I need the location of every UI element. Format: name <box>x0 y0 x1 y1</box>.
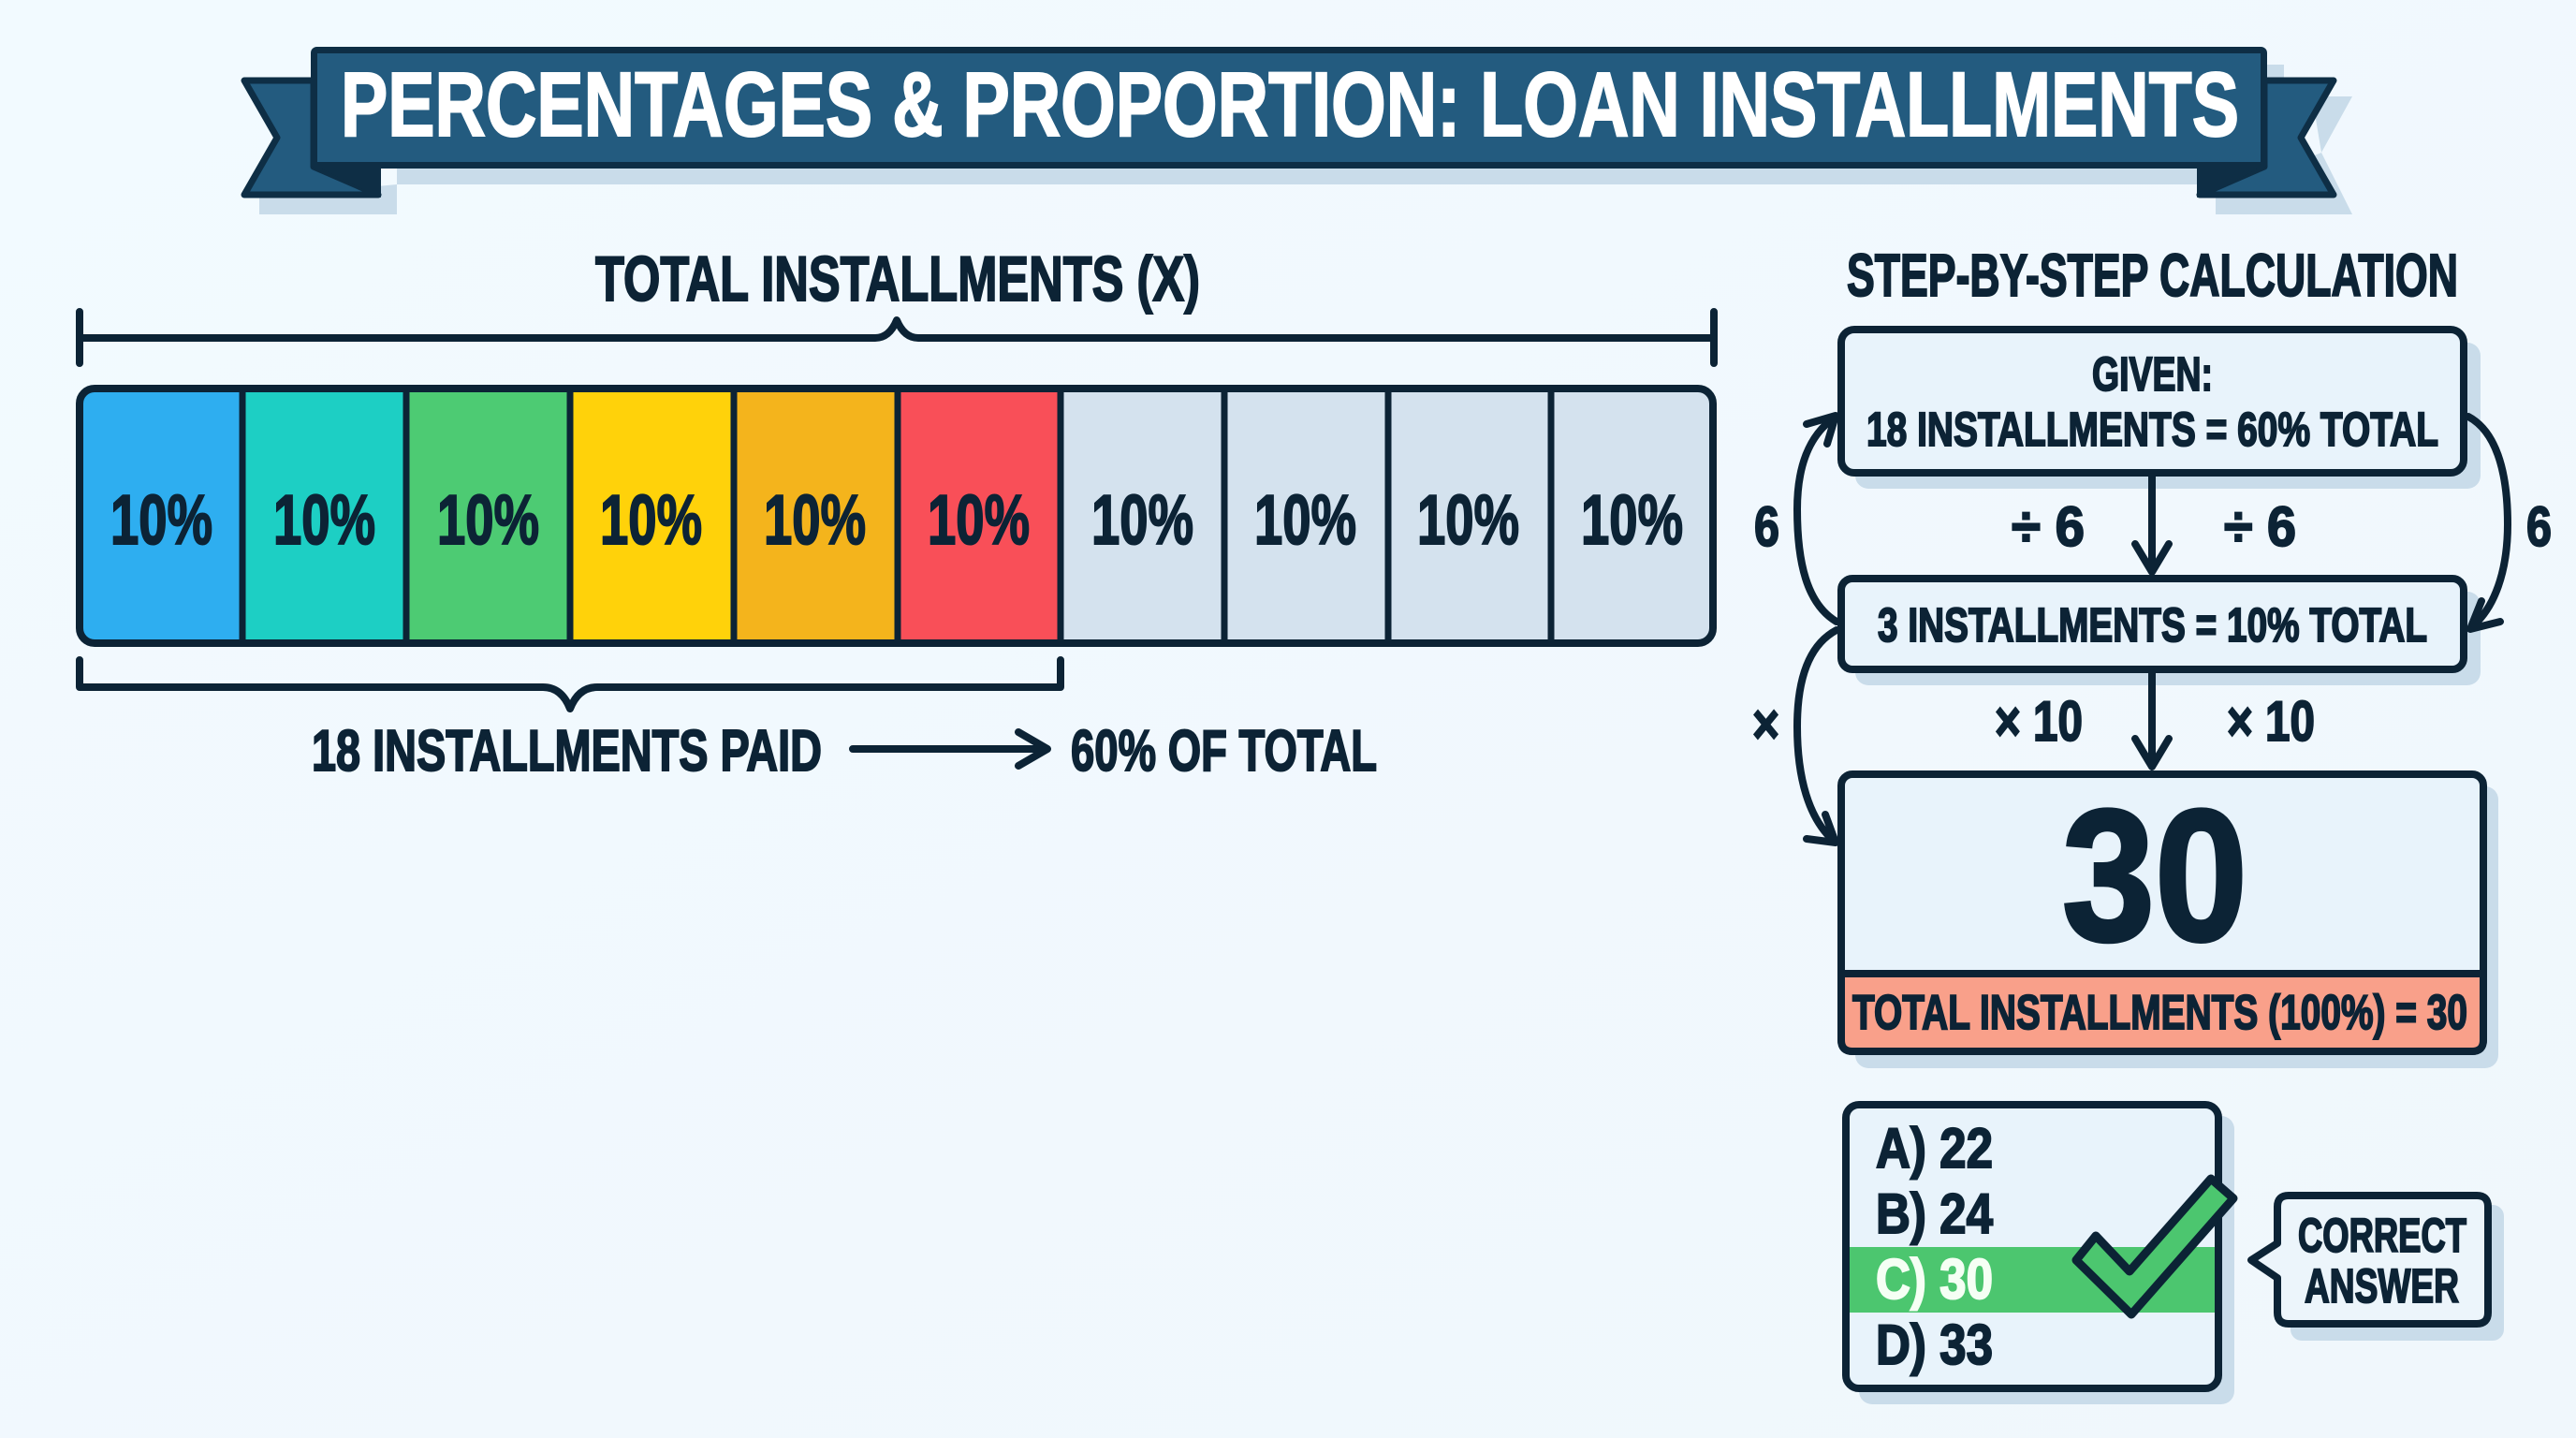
option A: A) 22 <box>1876 1117 1993 1180</box>
label: divide left: ÷ 6 <box>2012 495 2085 558</box>
cell 10 grey: 10% <box>1581 480 1683 559</box>
option B: B) 24 <box>1876 1182 1994 1245</box>
label: multiply right: × 10 <box>2227 690 2315 753</box>
cell 1 blue: 10% <box>110 480 212 559</box>
heading: total installments: TOTAL INSTALLMENTS (X) <box>595 243 1200 315</box>
cell 8 grey <box>1224 389 1388 643</box>
label: side multiply: × <box>1752 693 1779 756</box>
arrow: paid to percent <box>853 732 1047 766</box>
cell 4 yellow: 10% <box>600 480 702 559</box>
cell 6 red: 10% <box>928 480 1030 559</box>
cell 5 orange <box>734 389 898 643</box>
arrow: unit step to result <box>2135 673 2169 767</box>
cell 4 yellow <box>570 389 734 643</box>
label: multiply left: × 10 <box>1995 690 2083 753</box>
title banner <box>244 51 2352 214</box>
arrow: given to unit step <box>2135 477 2169 572</box>
cell 5 orange: 10% <box>764 480 866 559</box>
cell 7 grey: 10% <box>1091 480 1193 559</box>
given label: GIVEN: <box>2092 347 2213 401</box>
result footer band <box>1841 974 2483 1051</box>
label: side 6 left: 6 <box>1754 495 1779 558</box>
label: 60% of total: 60% OF TOTAL <box>1071 719 1377 784</box>
cell 7 grey <box>1061 389 1224 643</box>
highlight: option C <box>1850 1247 2215 1313</box>
callout line 1: CORRECT <box>2298 1209 2466 1262</box>
label: side 6 right: 6 <box>2526 495 2552 558</box>
box: result <box>1841 771 2498 1068</box>
cell 3 green <box>406 389 570 643</box>
cell 8 grey: 10% <box>1254 480 1356 559</box>
cell 3 green: 10% <box>437 480 539 559</box>
cell 1 blue <box>80 389 242 643</box>
cell 2 teal: 10% <box>273 480 375 559</box>
label: divide right: ÷ 6 <box>2224 495 2296 558</box>
cell 10 grey <box>1551 389 1713 643</box>
top bracket <box>80 312 1714 363</box>
box: given <box>1841 330 2481 489</box>
segmented bar: ten 10% cells <box>80 389 1713 643</box>
cell 9 grey: 10% <box>1417 480 1519 559</box>
option D: D) 33 <box>1876 1313 1993 1376</box>
callout line 2: ANSWER <box>2305 1259 2459 1313</box>
curved arrow: right divide <box>2468 417 2508 629</box>
cell 6 red <box>898 389 1061 643</box>
result number: 30 <box>2062 771 2247 980</box>
cell 9 grey <box>1388 389 1551 643</box>
curved arrow: left divide <box>1797 416 1837 622</box>
answer options panel <box>1846 1105 2234 1404</box>
callout: correct answer <box>2251 1196 2504 1341</box>
bottom bracket <box>80 660 1061 709</box>
box: unit step <box>1841 579 2481 685</box>
label: 18 installments paid: 18 INSTALLMENTS PAID <box>312 719 822 784</box>
curved arrow: left multiply <box>1797 630 1837 843</box>
option C: C) 30 <box>1876 1248 1993 1311</box>
cell 2 teal <box>242 389 406 643</box>
icon: green check mark <box>2076 1179 2233 1314</box>
